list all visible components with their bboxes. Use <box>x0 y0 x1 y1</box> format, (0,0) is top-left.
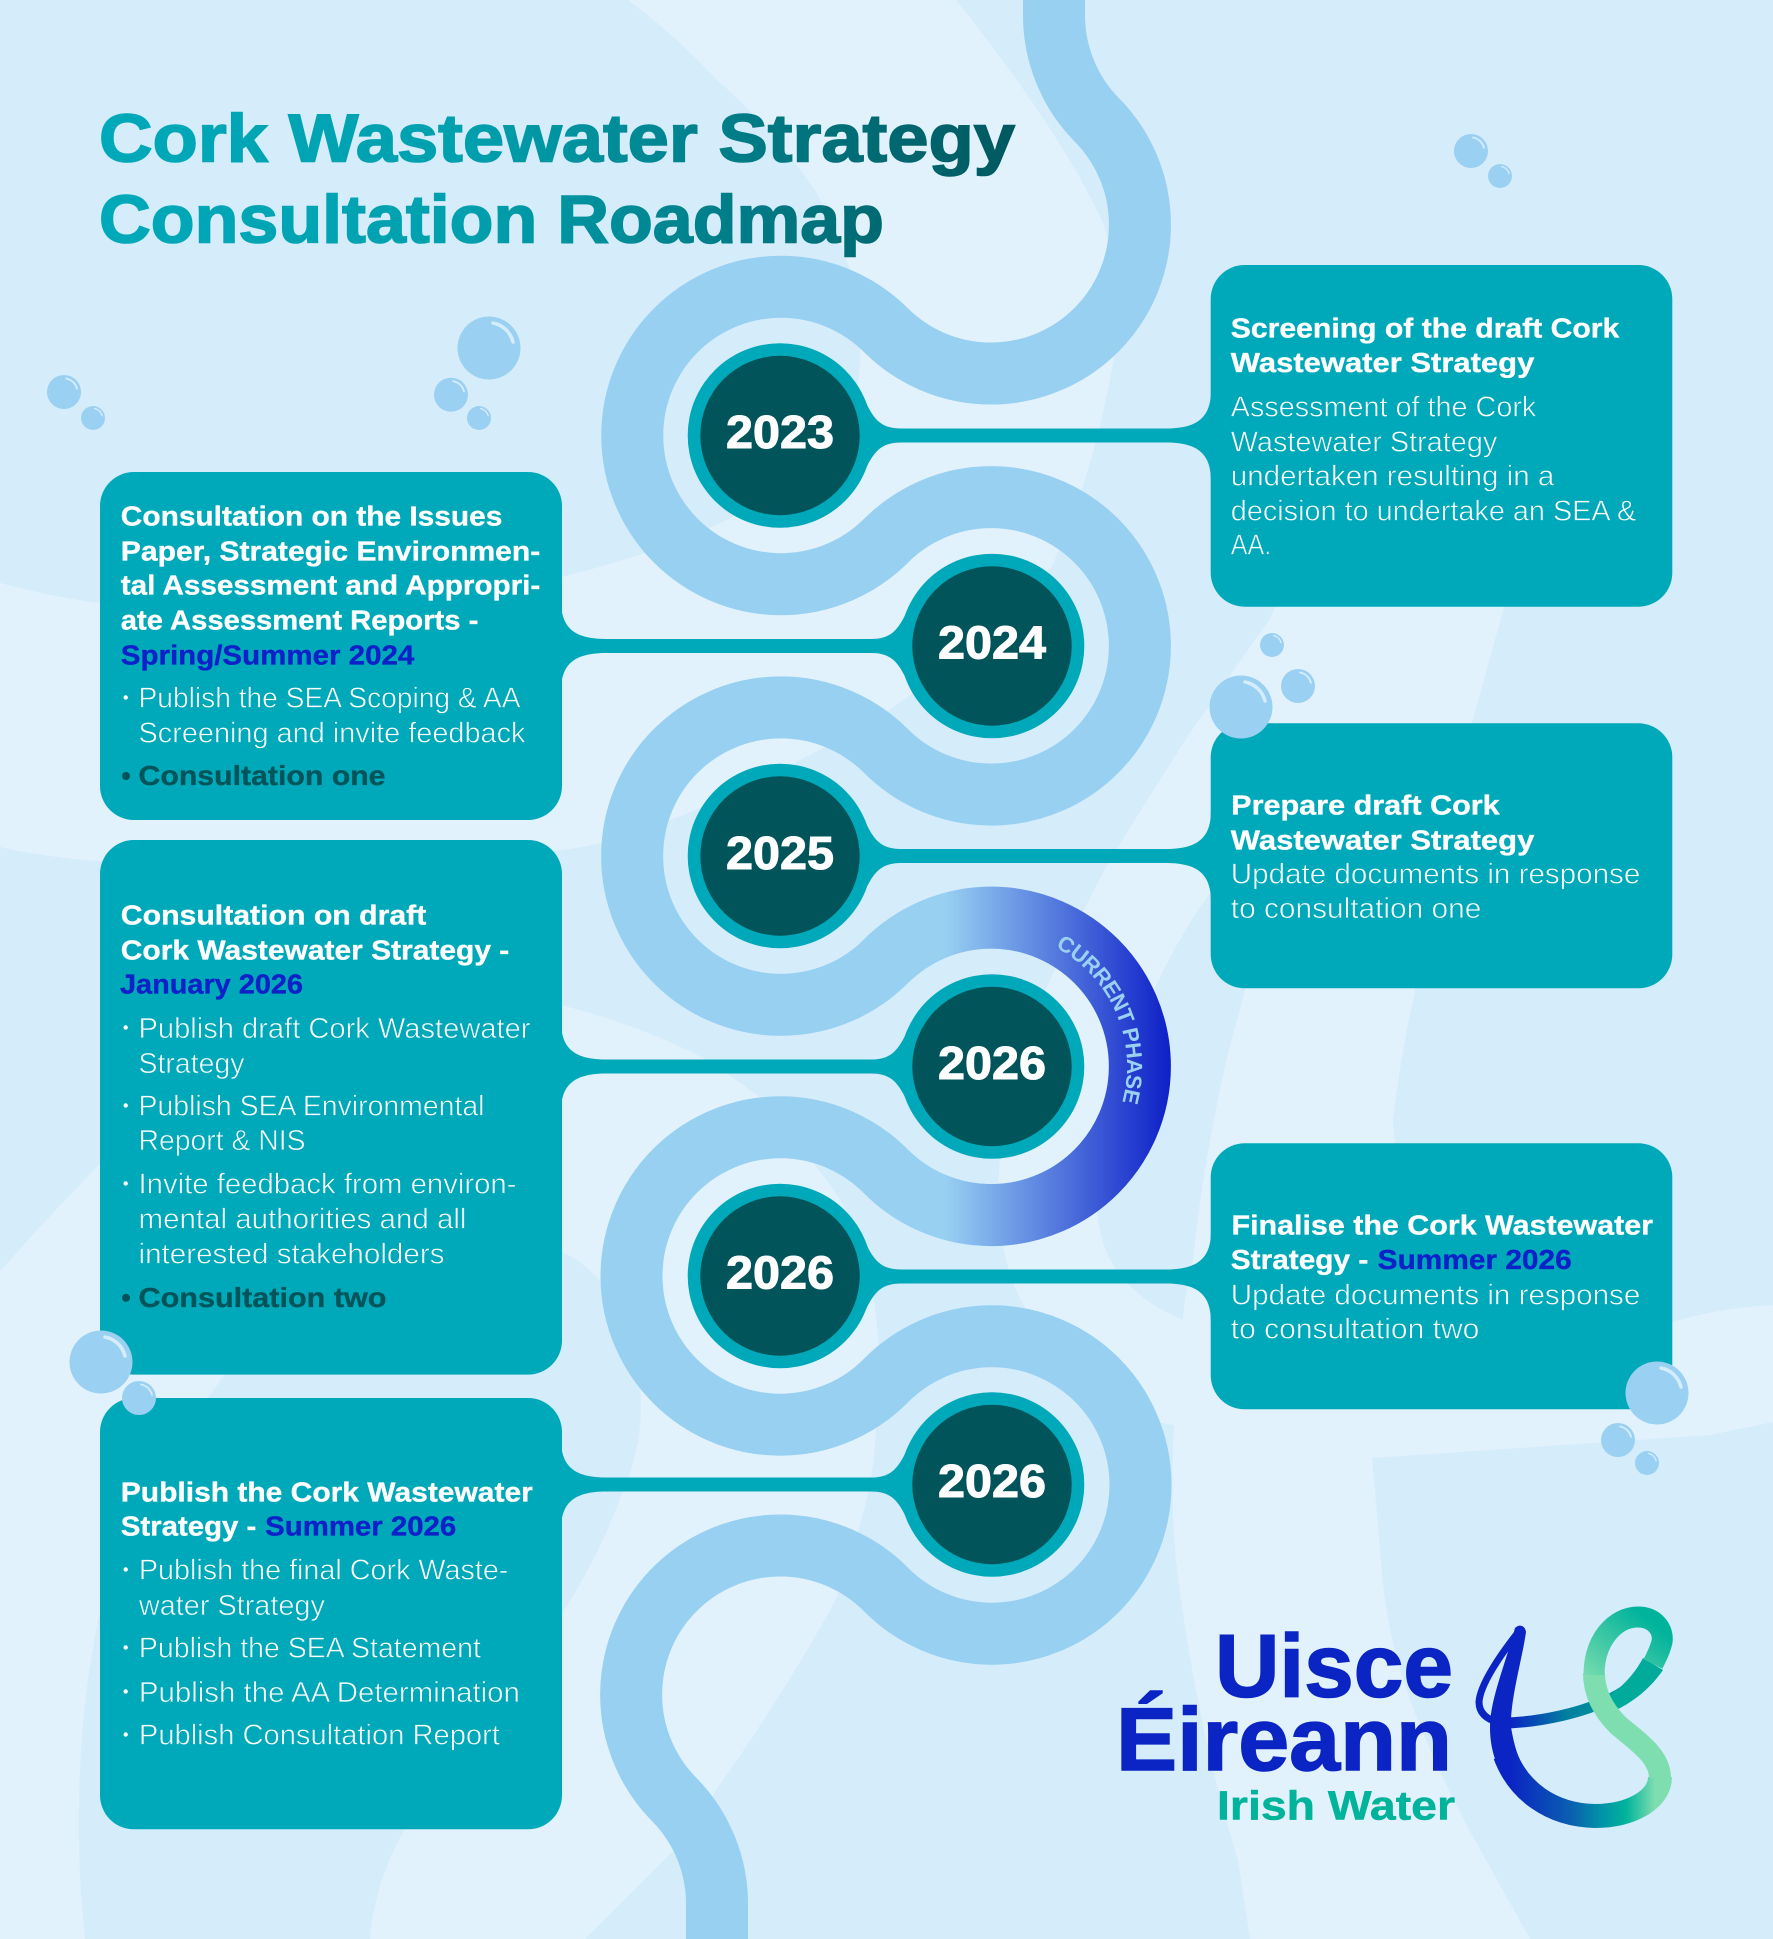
title: Consultation Roadmap <box>99 181 884 257</box>
bullet list: Publish Consultation Report <box>139 1720 500 1752</box>
panel: prepare draft strategy <box>1211 723 1672 988</box>
heading: Summer 2026 <box>265 1511 456 1542</box>
description: to consultation one <box>1231 893 1481 925</box>
description: to consultation two <box>1231 1314 1479 1346</box>
description: Wastewater Strategy <box>1231 426 1498 458</box>
logo wordmark: Uisce <box>1215 1616 1453 1716</box>
bubbles <box>47 134 1689 1475</box>
bullet list <box>122 1013 531 1313</box>
description: Update documents in response <box>1231 858 1640 890</box>
bullet list: Publish draft Cork Wastewater <box>138 1013 531 1045</box>
current phase label: CURRENT PHASE <box>1058 936 1142 1104</box>
heading: Strategy - <box>121 1511 256 1542</box>
description <box>1231 858 1640 925</box>
heading <box>121 1477 533 1542</box>
panel: consultation on draft strategy <box>100 840 562 1375</box>
bullet list: water Strategy <box>138 1590 325 1622</box>
heading: Paper, Strategic Environmen- <box>121 536 540 567</box>
year marker 2025 <box>688 764 872 948</box>
heading: January 2026 <box>120 969 303 1000</box>
bullet list: interested stakeholders <box>138 1239 444 1271</box>
year marker 2023 <box>688 343 872 528</box>
description: undertaken resulting in a <box>1231 460 1555 492</box>
year marker 2026 finalise <box>688 1184 872 1368</box>
heading: Strategy - <box>1231 1244 1368 1275</box>
heading: Screening of the draft Cork <box>1231 312 1620 343</box>
description: AA. <box>1231 530 1271 562</box>
winding pipeline path <box>631 0 1140 1939</box>
year marker 2024: 2024 <box>938 616 1046 668</box>
bullet list: Strategy <box>138 1048 245 1080</box>
heading <box>121 501 540 671</box>
bullet list: mental authorities and all <box>138 1204 466 1236</box>
heading: Cork Wastewater Strategy - <box>121 934 509 965</box>
year marker 2023: 2023 <box>726 406 834 458</box>
description: Assessment of the Cork <box>1231 392 1537 424</box>
logo wordmark: Éireann <box>1116 1689 1452 1789</box>
logo wordmark: Irish Water <box>1217 1782 1455 1828</box>
heading: tal Assessment and Appropri- <box>121 570 540 601</box>
heading: Prepare draft Cork <box>1231 790 1500 821</box>
current phase highlighted arc <box>886 918 1140 1215</box>
year marker 2026 current: 2026 <box>938 1037 1046 1089</box>
heading: Wastewater Strategy <box>1231 347 1535 378</box>
bullet list: Report & NIS <box>138 1125 306 1157</box>
bullet list: Consultation one <box>138 760 386 791</box>
heading: Publish the Cork Wastewater <box>121 1477 533 1508</box>
description: Update documents in response <box>1231 1279 1640 1311</box>
bullet list: Invite feedback from environ- <box>138 1169 516 1201</box>
panel: finalise strategy <box>1211 1143 1672 1409</box>
year marker 2026 publish <box>900 1392 1084 1577</box>
title: Cork Wastewater Strategy <box>99 101 1015 177</box>
heading: Consultation on the Issues <box>121 501 502 532</box>
panel: publish the strategy <box>100 1398 562 1829</box>
bullet list: Publish the AA Determination <box>139 1677 520 1709</box>
bullet list: Screening and invite feedback <box>138 718 526 750</box>
bullet list: Publish the final Cork Waste- <box>139 1555 508 1587</box>
heading: Spring/Summer 2024 <box>121 640 415 671</box>
heading: ate Assessment Reports - <box>121 605 478 636</box>
year marker 2025: 2025 <box>726 827 834 879</box>
heading <box>1231 312 1620 378</box>
heading: Consultation on draft <box>121 900 426 931</box>
heading: Finalise the Cork Wastewater <box>1232 1209 1653 1240</box>
description <box>1231 1279 1640 1346</box>
logo mark <box>1479 1617 1663 1816</box>
logo: Uisce Éireann Irish Water <box>1116 1616 1663 1828</box>
heading <box>1231 1209 1653 1275</box>
title <box>99 101 1015 257</box>
description <box>1231 392 1636 562</box>
bullet list: Consultation two <box>138 1282 386 1313</box>
heading: Wastewater Strategy <box>1231 824 1535 855</box>
bullet list <box>124 1555 520 1752</box>
year marker 2026 current <box>900 974 1084 1159</box>
bullet list: Publish the SEA Scoping & AA <box>138 683 521 715</box>
bullet list: Publish SEA Environmental <box>138 1091 484 1123</box>
panel: screening <box>1211 265 1672 607</box>
panel: consultation on issues paper <box>100 472 562 820</box>
bullet list <box>122 683 526 791</box>
connectors <box>561 390 1211 1530</box>
heading: Summer 2026 <box>1378 1244 1572 1275</box>
heading <box>1231 790 1535 855</box>
bullet list: Publish the SEA Statement <box>139 1633 481 1665</box>
heading <box>120 900 509 1000</box>
year marker 2026 publish: 2026 <box>938 1455 1046 1507</box>
year marker 2026 finalise: 2026 <box>726 1246 834 1298</box>
description: decision to undertake an SEA & <box>1231 495 1636 527</box>
logo wordmark <box>1116 1616 1455 1828</box>
year marker 2024 <box>900 554 1084 738</box>
